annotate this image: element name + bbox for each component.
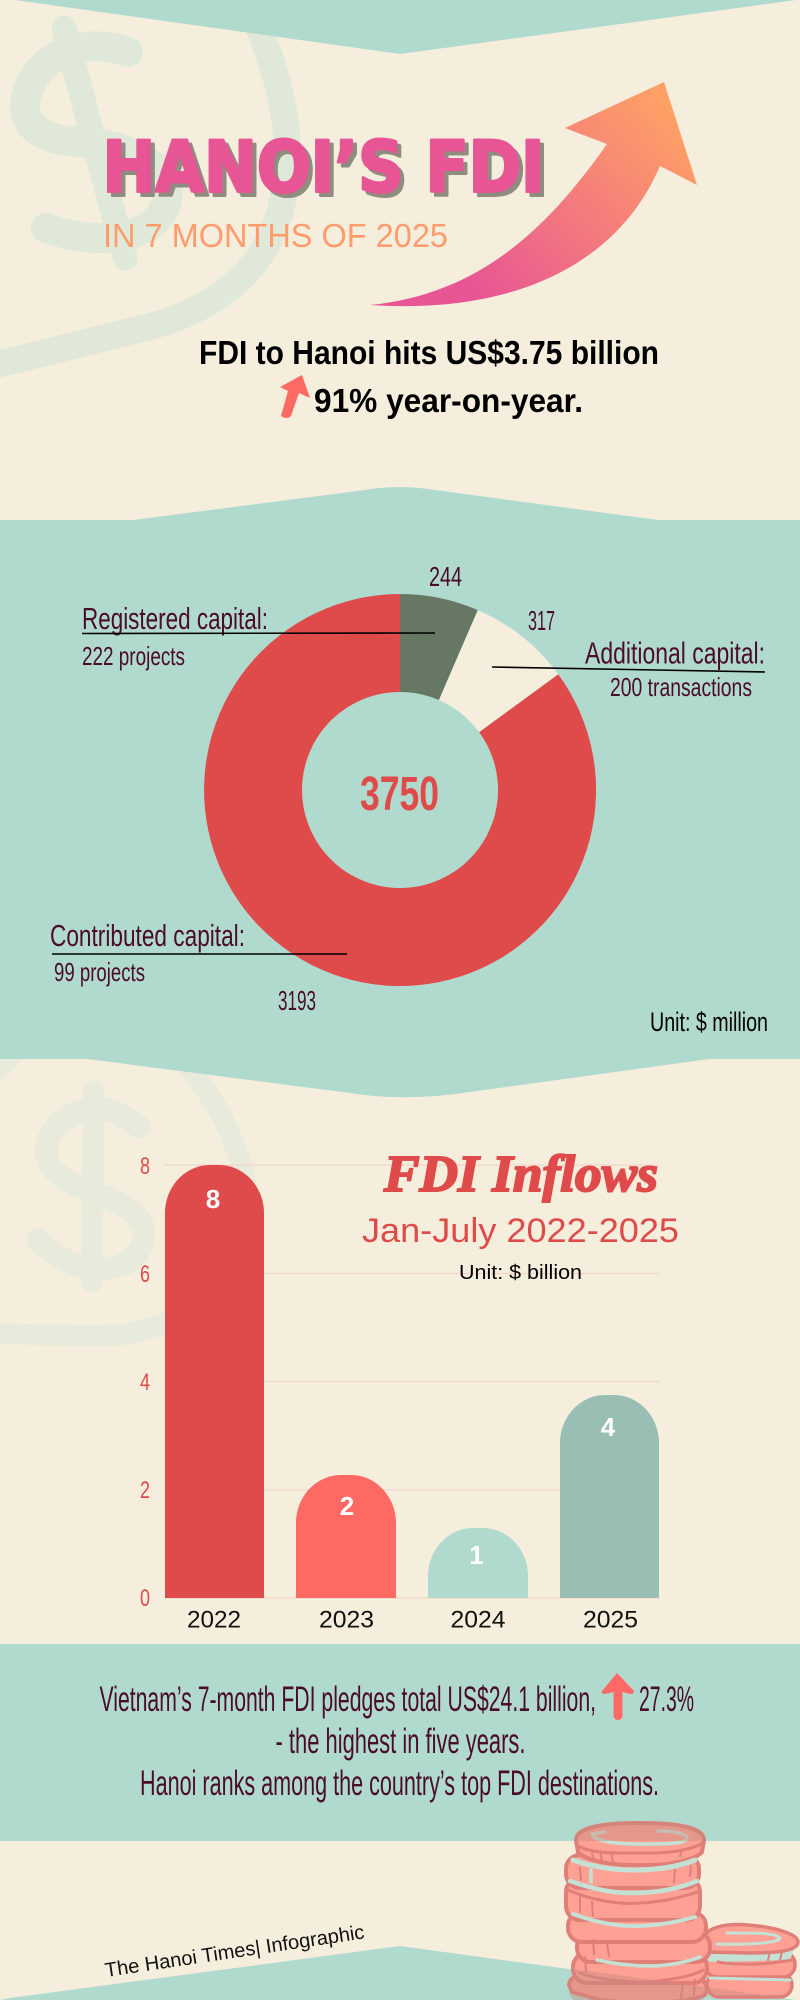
label: additional capital (492, 636, 765, 702)
panel background (0, 487, 800, 1097)
bar 2025: 4 (601, 1412, 616, 1442)
donut chart (204, 594, 596, 986)
bar 2024: 1 (469, 1540, 484, 1570)
chart title: FDI Inflows (383, 1146, 658, 1203)
bar 2023: 2 (340, 1491, 354, 1521)
bar 2022 (165, 1165, 264, 1598)
bar 2022: 8 (206, 1184, 220, 1214)
bar 2023 (296, 1475, 396, 1598)
summary text: 27.3% (639, 1680, 694, 1719)
y axis labels: 8 (140, 1153, 150, 1180)
bar 2024 (428, 1528, 528, 1598)
summary text (100, 1680, 694, 1803)
summary text: - the highest in five years. (276, 1722, 526, 1761)
y axis labels: 6 (140, 1261, 150, 1288)
icon: coin stacks (560, 1815, 800, 2000)
x axis labels: 2024 (450, 1606, 506, 1634)
top teal banner (15, 0, 796, 54)
label: registered capital: 222 projects (82, 641, 185, 671)
y axis labels: 4 (140, 1369, 150, 1396)
y axis labels: 2 (140, 1477, 150, 1504)
chart subtitle: Jan-July 2022-2025 (362, 1212, 679, 1250)
label: contributed capital (50, 918, 347, 987)
headline text (199, 334, 659, 419)
summary background (0, 1644, 800, 1841)
label: registered capital: Registered capital: (82, 601, 268, 636)
grid lines (165, 1165, 659, 1598)
main coin stack (566, 1823, 710, 2000)
label: registered capital (82, 601, 435, 671)
y axis labels: 0 (140, 1585, 150, 1612)
subtitle: IN 7 MONTHS OF 2025 (103, 217, 448, 254)
footer credit: The Hanoi Times| Infographic (103, 1921, 366, 1982)
x axis labels (187, 1606, 638, 1634)
icon: small up arrow (280, 375, 310, 418)
y axis labels (140, 1153, 150, 1612)
title: HANOI’S FDI (102, 126, 544, 208)
label: additional capital: 200 transactions (610, 672, 752, 702)
panel: capital donut (0, 487, 800, 1097)
bottom teal banner (0, 1946, 796, 2000)
label: contributed capital: 99 projects (54, 957, 145, 987)
x axis labels: 2025 (583, 1606, 638, 1634)
icon: faded dollar bag top (0, 25, 287, 365)
bar 2025 (560, 1395, 659, 1598)
donut total: 3750 (360, 768, 439, 821)
value 317: 317 (528, 605, 555, 636)
icon: up arrow (602, 1673, 634, 1720)
bar chart: FDI inflows (140, 1146, 679, 1634)
small coin stack (705, 1925, 798, 1997)
value 3193: 3193 (278, 985, 316, 1016)
headline text: 91% year-on-year. (314, 382, 583, 419)
panel: summary (0, 1644, 800, 1841)
title: HANOI’S FDI (106, 130, 548, 212)
x axis labels: 2023 (319, 1606, 374, 1634)
coin tint over teal areas (569, 1821, 776, 2000)
label: contributed capital: Contributed capital: (50, 918, 245, 953)
headline text: FDI to Hanoi hits US$3.75 billion (199, 334, 659, 371)
icon: faded dollar bag middle (0, 1052, 248, 1336)
icon: big rising arrow (370, 82, 697, 306)
value 244: 244 (429, 561, 462, 592)
chart unit: Unit: $ billion (459, 1262, 582, 1284)
x axis labels: 2022 (187, 1606, 241, 1634)
